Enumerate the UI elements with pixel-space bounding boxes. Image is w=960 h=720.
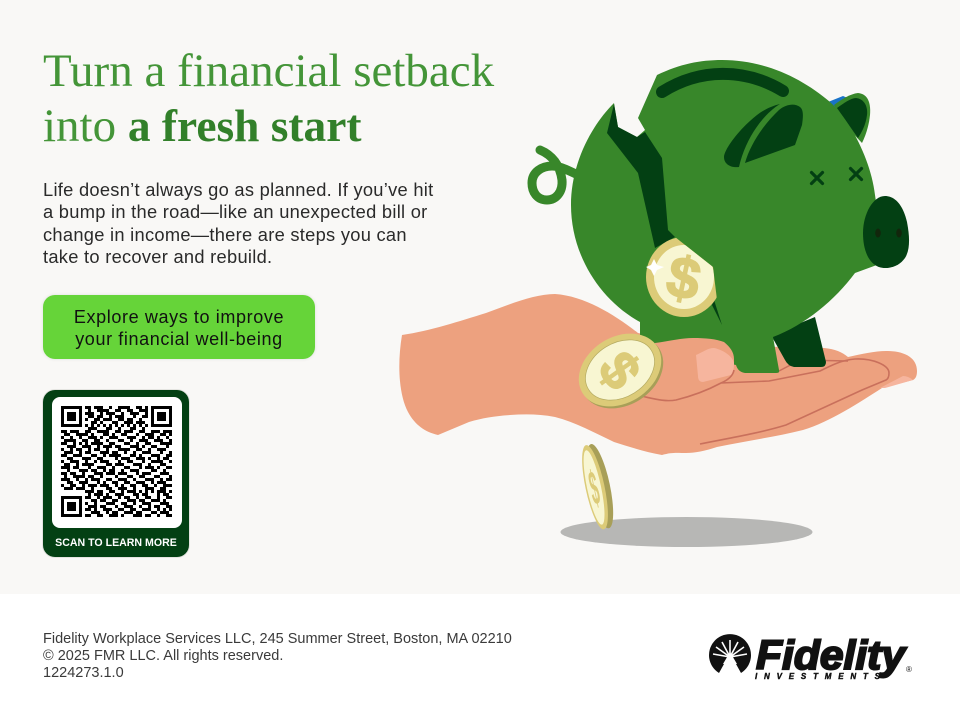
thumbnail xyxy=(696,348,734,382)
pig back leg xyxy=(771,317,826,367)
icon: falling coin xyxy=(577,442,619,531)
title: into a fresh start xyxy=(43,100,362,152)
slot xyxy=(662,74,783,92)
shadow xyxy=(560,517,812,547)
button: explore ways: your financial well-being xyxy=(75,329,283,349)
hand creases behind pig xyxy=(779,360,848,371)
intro text block xyxy=(43,179,434,267)
snout xyxy=(863,196,909,268)
logo: Fidelity Investments xyxy=(709,632,912,681)
thumb xyxy=(641,338,734,400)
intro text block: change in income—there are steps you can xyxy=(43,224,407,245)
panel: QR code card xyxy=(43,390,189,557)
icon: coin on palm: $ xyxy=(586,341,652,400)
panel: footer address text: 1224273.1.0 xyxy=(43,665,124,681)
intro text block: Life doesn’t always go as planned. If you’ve hit xyxy=(43,179,433,200)
crack lower sliver xyxy=(712,300,722,325)
pig tail xyxy=(532,150,576,200)
pig left ear xyxy=(724,104,803,167)
button: explore ways: Explore ways to improve xyxy=(74,307,284,327)
QR caption: SCAN TO LEARN MORE xyxy=(55,537,177,549)
body crack xyxy=(607,104,675,248)
icon: coin in pig xyxy=(646,237,722,317)
panel: footer address text: © 2025 FMR LLC. All rights reserved. xyxy=(43,648,283,664)
icon: falling coin: $ xyxy=(585,461,604,515)
panel: footer address text xyxy=(43,631,512,681)
blue ear sliver xyxy=(828,96,850,108)
registered mark: ® xyxy=(906,665,912,674)
fingertip xyxy=(880,376,913,388)
hand creases xyxy=(641,359,889,444)
icon: coin on palm xyxy=(565,319,677,423)
nostrils xyxy=(875,228,902,238)
pig right ear xyxy=(834,93,870,143)
title xyxy=(43,45,494,152)
intro text block: a bump in the road—like an unexpected bill or xyxy=(43,201,428,222)
eye: x xyxy=(812,168,862,184)
icon: coin in pig: $ xyxy=(661,243,706,314)
pig body xyxy=(571,60,885,373)
hand xyxy=(399,294,917,455)
tagline: INVESTMENTS xyxy=(755,672,881,681)
wordmark: Fidelity xyxy=(756,632,907,678)
QR code xyxy=(52,397,182,528)
illustration: piggy bank in hand xyxy=(399,60,917,547)
icon: sun xyxy=(709,634,751,673)
panel: footer address text: Fidelity Workplace Services LLC, 245 Summer Street, Boston, MA 02210 xyxy=(43,631,512,647)
intro text block: take to recover and rebuild. xyxy=(43,246,272,267)
button: explore ways xyxy=(43,295,315,359)
title: Turn a financial setback xyxy=(43,45,494,97)
